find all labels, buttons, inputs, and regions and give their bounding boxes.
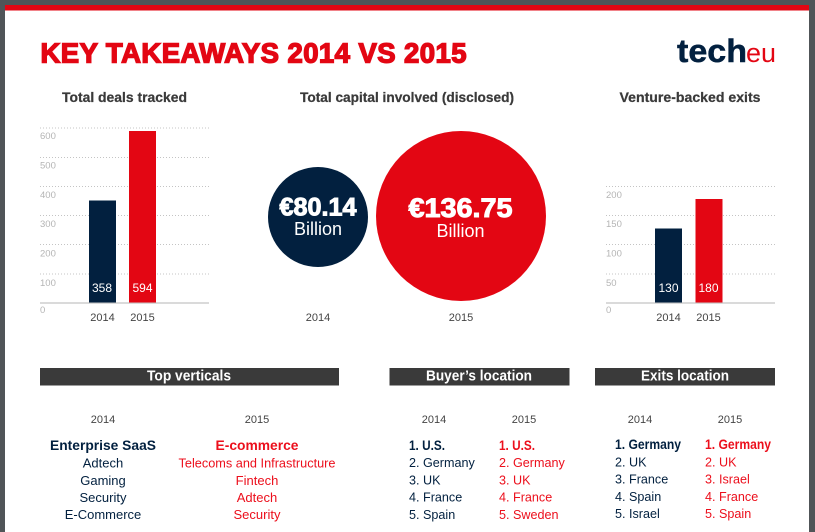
- list: top verticals 2014: Gaming: [80, 473, 126, 488]
- list: top verticals 2014: Security: [80, 490, 127, 505]
- section header: top verticals: Top verticals: [147, 368, 231, 384]
- list: buyer's location 2015: 2015: [512, 414, 536, 426]
- title: KEY TAKEAWAYS 2014 VS 2015: [40, 38, 466, 68]
- list: exits location 2015: 2. UK: [705, 456, 737, 470]
- list: exits location 2014: 1. Germany: [615, 437, 681, 452]
- circle year labels: [306, 312, 473, 324]
- bar chart: total deals tracked: 358: [92, 281, 112, 295]
- list: buyer's location 2014: 2. Germany: [409, 456, 475, 470]
- bar: 2015 deals: [129, 131, 156, 302]
- list: top verticals 2015: 2015: [245, 414, 269, 426]
- list: buyer's location 2015: [499, 414, 565, 522]
- list: exits location 2015: [705, 414, 771, 521]
- list: top verticals 2015: Fintech: [236, 473, 278, 488]
- circle: 2015 capital: €136.75: [408, 193, 512, 223]
- list: buyer's location 2015: 4. France: [499, 490, 552, 504]
- list: exits location 2014: 5. Israel: [615, 507, 660, 521]
- bar chart: total deals tracked: 300: [40, 219, 56, 230]
- list: top verticals 2015: E-commerce: [216, 438, 299, 453]
- list: exits location 2014: 2014: [628, 414, 652, 426]
- list: exits location 2015: 4. France: [705, 490, 758, 504]
- list: top verticals 2014: E-Commerce: [65, 507, 141, 522]
- bar chart: total deals tracked: 400: [40, 190, 56, 201]
- list: buyer's location 2015: 2. Germany: [499, 456, 565, 470]
- bar chart: venture-backed exits: 2014: [656, 312, 681, 324]
- list: top verticals 2015: Adtech: [237, 490, 277, 505]
- list: exits location 2014: 2. UK: [615, 456, 647, 470]
- bar chart: venture-backed exits: 200: [606, 190, 622, 201]
- logo: tech.eu: eu: [746, 38, 776, 68]
- list: buyer's location 2014: 1. U.S.: [409, 438, 445, 453]
- bar chart: venture-backed exits: 2015: [696, 312, 721, 324]
- circle: 2015 capital: Billion: [436, 221, 485, 241]
- list: buyer's location 2014: [409, 414, 475, 522]
- top red bar: [5, 5, 809, 10]
- list: exits location 2015: 3. Israel: [705, 472, 750, 486]
- bar chart: venture-backed exits: 100: [606, 248, 622, 260]
- list: exits location 2014: 3. France: [615, 472, 668, 486]
- bar chart: total deals tracked: 500: [40, 160, 56, 172]
- bar chart: total deals tracked: 2014: [90, 312, 115, 324]
- bar: 2014 deals: [89, 200, 116, 302]
- circle: 2014 capital: Billion: [294, 219, 342, 239]
- list: buyer's location 2015: 5. Sweden: [499, 508, 559, 522]
- list: top verticals 2015: Security: [234, 507, 281, 522]
- list: buyer's location 2014: 3. UK: [409, 474, 441, 488]
- list: buyer's location 2014: 4. France: [409, 490, 462, 504]
- list: exits location 2015: 5. Spain: [705, 507, 751, 521]
- list: exits location 2014: 4. Spain: [615, 490, 661, 504]
- heading: venture-backed exits: Venture-backed exits: [620, 89, 761, 105]
- heading: total deals tracked: Total deals tracked: [62, 89, 187, 105]
- bar chart: total deals tracked: [40, 128, 210, 324]
- bar chart: venture-backed exits: 130: [658, 281, 679, 295]
- bar: 2014 exits: [655, 228, 682, 302]
- bar chart: venture-backed exits: 0: [606, 305, 611, 316]
- circle year labels: 2015: [449, 312, 473, 324]
- section header: buyer's location: Buyer’s location: [426, 368, 532, 384]
- bar chart: total deals tracked: 0: [40, 305, 45, 316]
- bar chart: total deals tracked: 2015: [130, 312, 155, 324]
- list: top verticals 2014: Adtech: [83, 456, 123, 470]
- bar: 2015 exits: [696, 199, 722, 302]
- list: buyer's location 2015: 3. UK: [499, 474, 531, 488]
- circle: 2014 capital: [268, 167, 368, 267]
- list: exits location 2015: 2015: [718, 414, 742, 426]
- section header: exits location: Exits location: [641, 368, 729, 384]
- list: top verticals 2015: [178, 414, 336, 522]
- bar chart: total deals tracked: 100: [40, 278, 56, 289]
- bar chart: venture-backed exits: 50: [606, 278, 617, 289]
- section header: buyer's location: [390, 368, 570, 386]
- bar chart: venture-backed exits: 150: [606, 219, 622, 230]
- circle: 2014 capital: €80.14: [280, 194, 357, 222]
- circle year labels: 2014: [306, 312, 330, 324]
- bar chart: venture-backed exits: 180: [698, 281, 719, 295]
- list: buyer's location 2014: 5. Spain: [409, 508, 455, 522]
- list: top verticals 2014: Enterprise SaaS: [50, 438, 156, 453]
- list: exits location 2015: 1. Germany: [705, 437, 771, 452]
- circle: 2015 capital: [376, 131, 546, 301]
- heading: total capital involved: Total capital involved (disclosed): [300, 89, 514, 105]
- logo: tech.eu: tech: [677, 33, 747, 69]
- bar chart: total deals tracked: 600: [40, 131, 56, 142]
- list: top verticals 2014: [50, 414, 156, 522]
- list: top verticals 2014: 2014: [91, 414, 115, 426]
- bar chart: venture-backed exits: [606, 186, 776, 324]
- list: top verticals 2015: Telecoms and Infrastructure: [178, 456, 336, 470]
- list: buyer's location 2015: 1. U.S.: [499, 438, 535, 453]
- bar chart: total deals tracked: 200: [40, 248, 56, 260]
- section header: exits location: [595, 368, 775, 386]
- bar chart: total deals tracked: 594: [132, 281, 153, 295]
- logo: tech.eu: [677, 33, 776, 69]
- list: buyer's location 2014: 2014: [422, 414, 446, 426]
- section header: top verticals: [40, 368, 339, 386]
- list: exits location 2014: [615, 414, 681, 521]
